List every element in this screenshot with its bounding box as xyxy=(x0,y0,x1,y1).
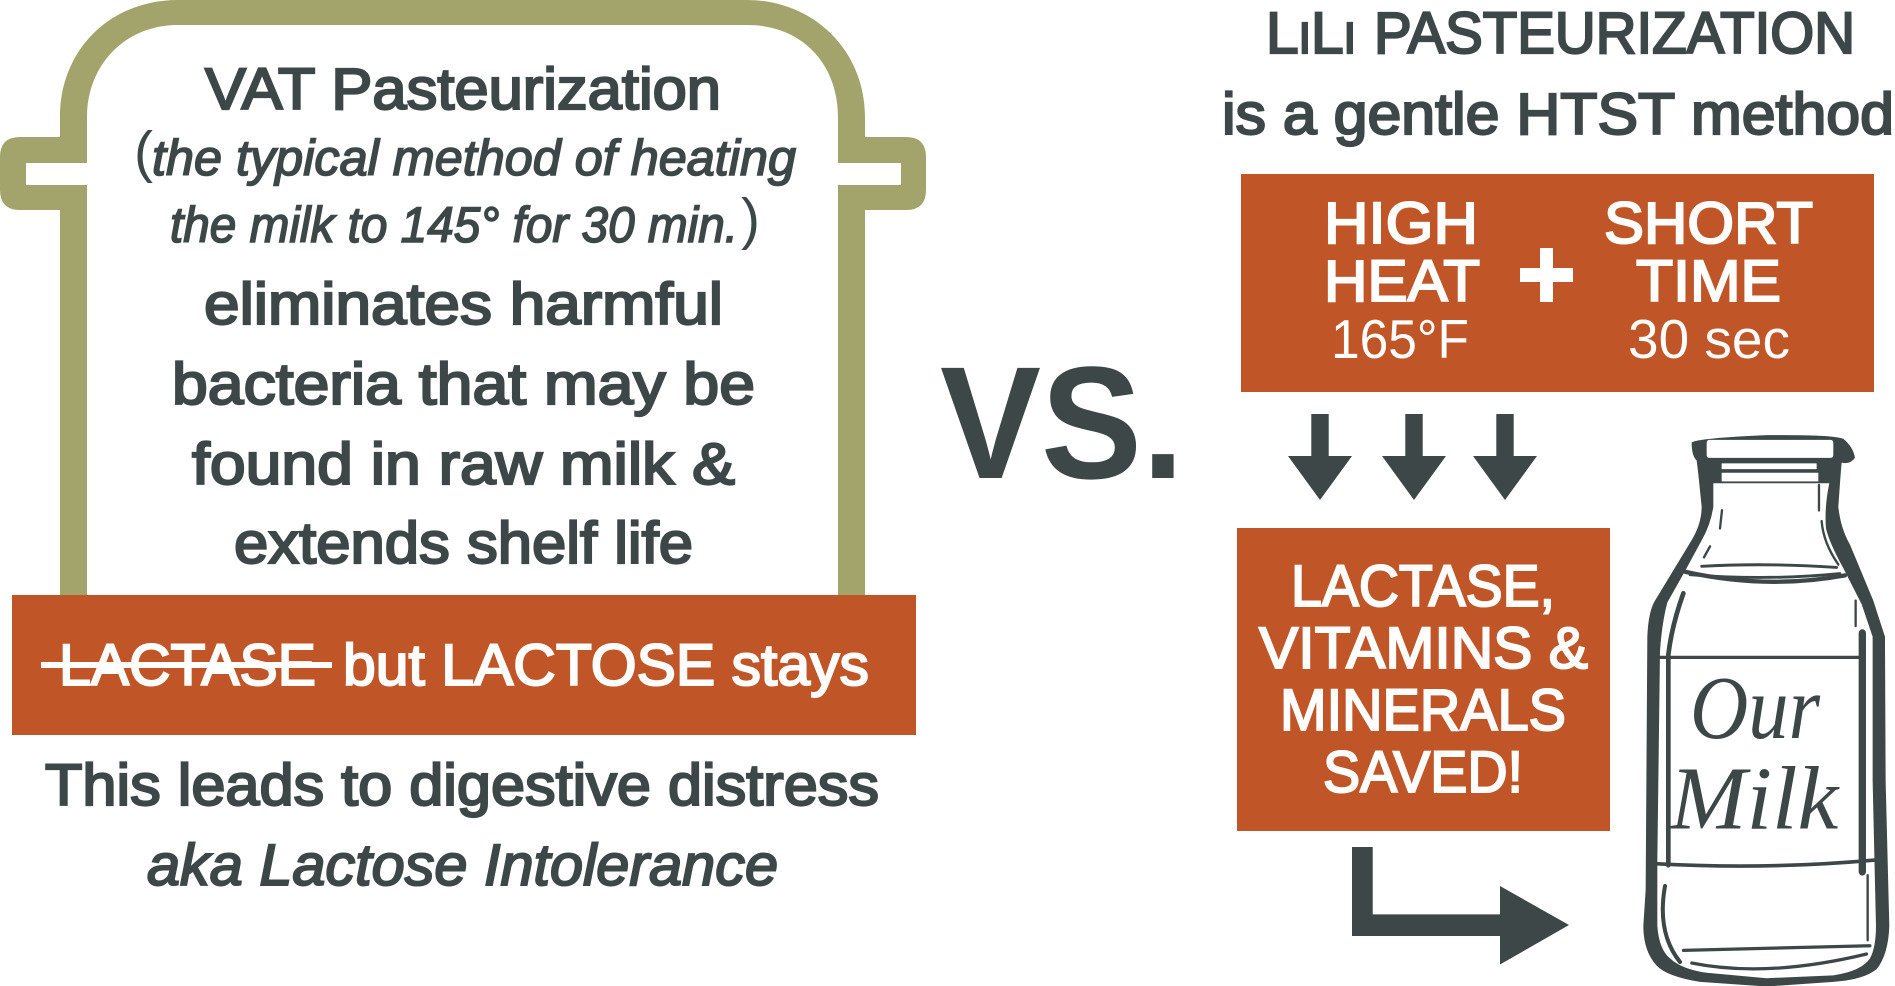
text: LACTASE,: LACTASE, xyxy=(1291,554,1555,619)
heading: VAT Pasteurization: VAT Pasteurization xyxy=(205,57,721,122)
heading: gentle HTST method: is a gentle HTST method xyxy=(1222,82,1894,147)
panel: lactase vitamins minerals saved xyxy=(1237,528,1610,831)
heading: LiLi Pasteurization: PASTEURIZATION xyxy=(1374,1,1855,66)
text: typical method line 1: ( xyxy=(134,120,153,184)
text: bacteria that may be: bacteria that may be xyxy=(172,352,755,417)
text: HIGH: HIGH xyxy=(1324,191,1478,256)
text: extends shelf life: extends shelf life xyxy=(234,511,693,576)
struck-through LACTASE: LACTASE xyxy=(59,633,316,698)
text: eliminates harmful: eliminates harmful xyxy=(204,272,723,337)
panel: high heat plus short time xyxy=(1241,174,1874,392)
text: HEAT: HEAT xyxy=(1324,249,1480,314)
bottle label text: Milk: Milk xyxy=(1668,748,1840,848)
bottle neck ring highlights xyxy=(1722,463,1818,481)
bottle contour lines xyxy=(1655,485,1875,969)
text: VITAMINS &: VITAMINS & xyxy=(1259,616,1588,681)
arrow: down 3 xyxy=(1473,414,1537,500)
text: TIME: TIME xyxy=(1636,249,1781,314)
text: SHORT: SHORT xyxy=(1604,191,1813,256)
panel: VAT pot outline xyxy=(0,0,926,595)
arrow: down 2 xyxy=(1382,414,1446,500)
bottle label text: Our: Our xyxy=(1690,658,1821,758)
text: SAVED!: SAVED! xyxy=(1323,740,1523,805)
arrow: down 1 xyxy=(1288,414,1352,500)
text: typical method line 1: the typical method of heating xyxy=(152,130,796,186)
panel: lactase banner xyxy=(12,595,916,735)
heading: LiLi Pasteurization: LILI xyxy=(1266,1,1356,66)
text: typical method line 2: ) xyxy=(741,187,760,251)
text: 30 sec: 30 sec xyxy=(1628,308,1790,370)
text: digestive distress: This leads to digestive distress xyxy=(45,753,879,818)
icon: plus xyxy=(1520,248,1573,302)
text: typical method line 2: the milk to 145° for 30 min. xyxy=(170,197,738,253)
icon: milk bottle xyxy=(1643,435,1889,986)
text: aka Lactose Intolerance: aka Lactose Intolerance xyxy=(147,833,778,898)
text: found in raw milk: found in raw milk & xyxy=(192,432,735,497)
bottle lip highlight xyxy=(1707,440,1833,458)
heading: VS.: VS. xyxy=(940,333,1184,512)
text: 165°F: 165°F xyxy=(1331,308,1469,370)
text: MINERALS: MINERALS xyxy=(1280,678,1566,743)
text: but LACTOSE stays: but LACTOSE stays xyxy=(343,633,869,698)
arrow: bent to bottle xyxy=(1352,847,1569,964)
